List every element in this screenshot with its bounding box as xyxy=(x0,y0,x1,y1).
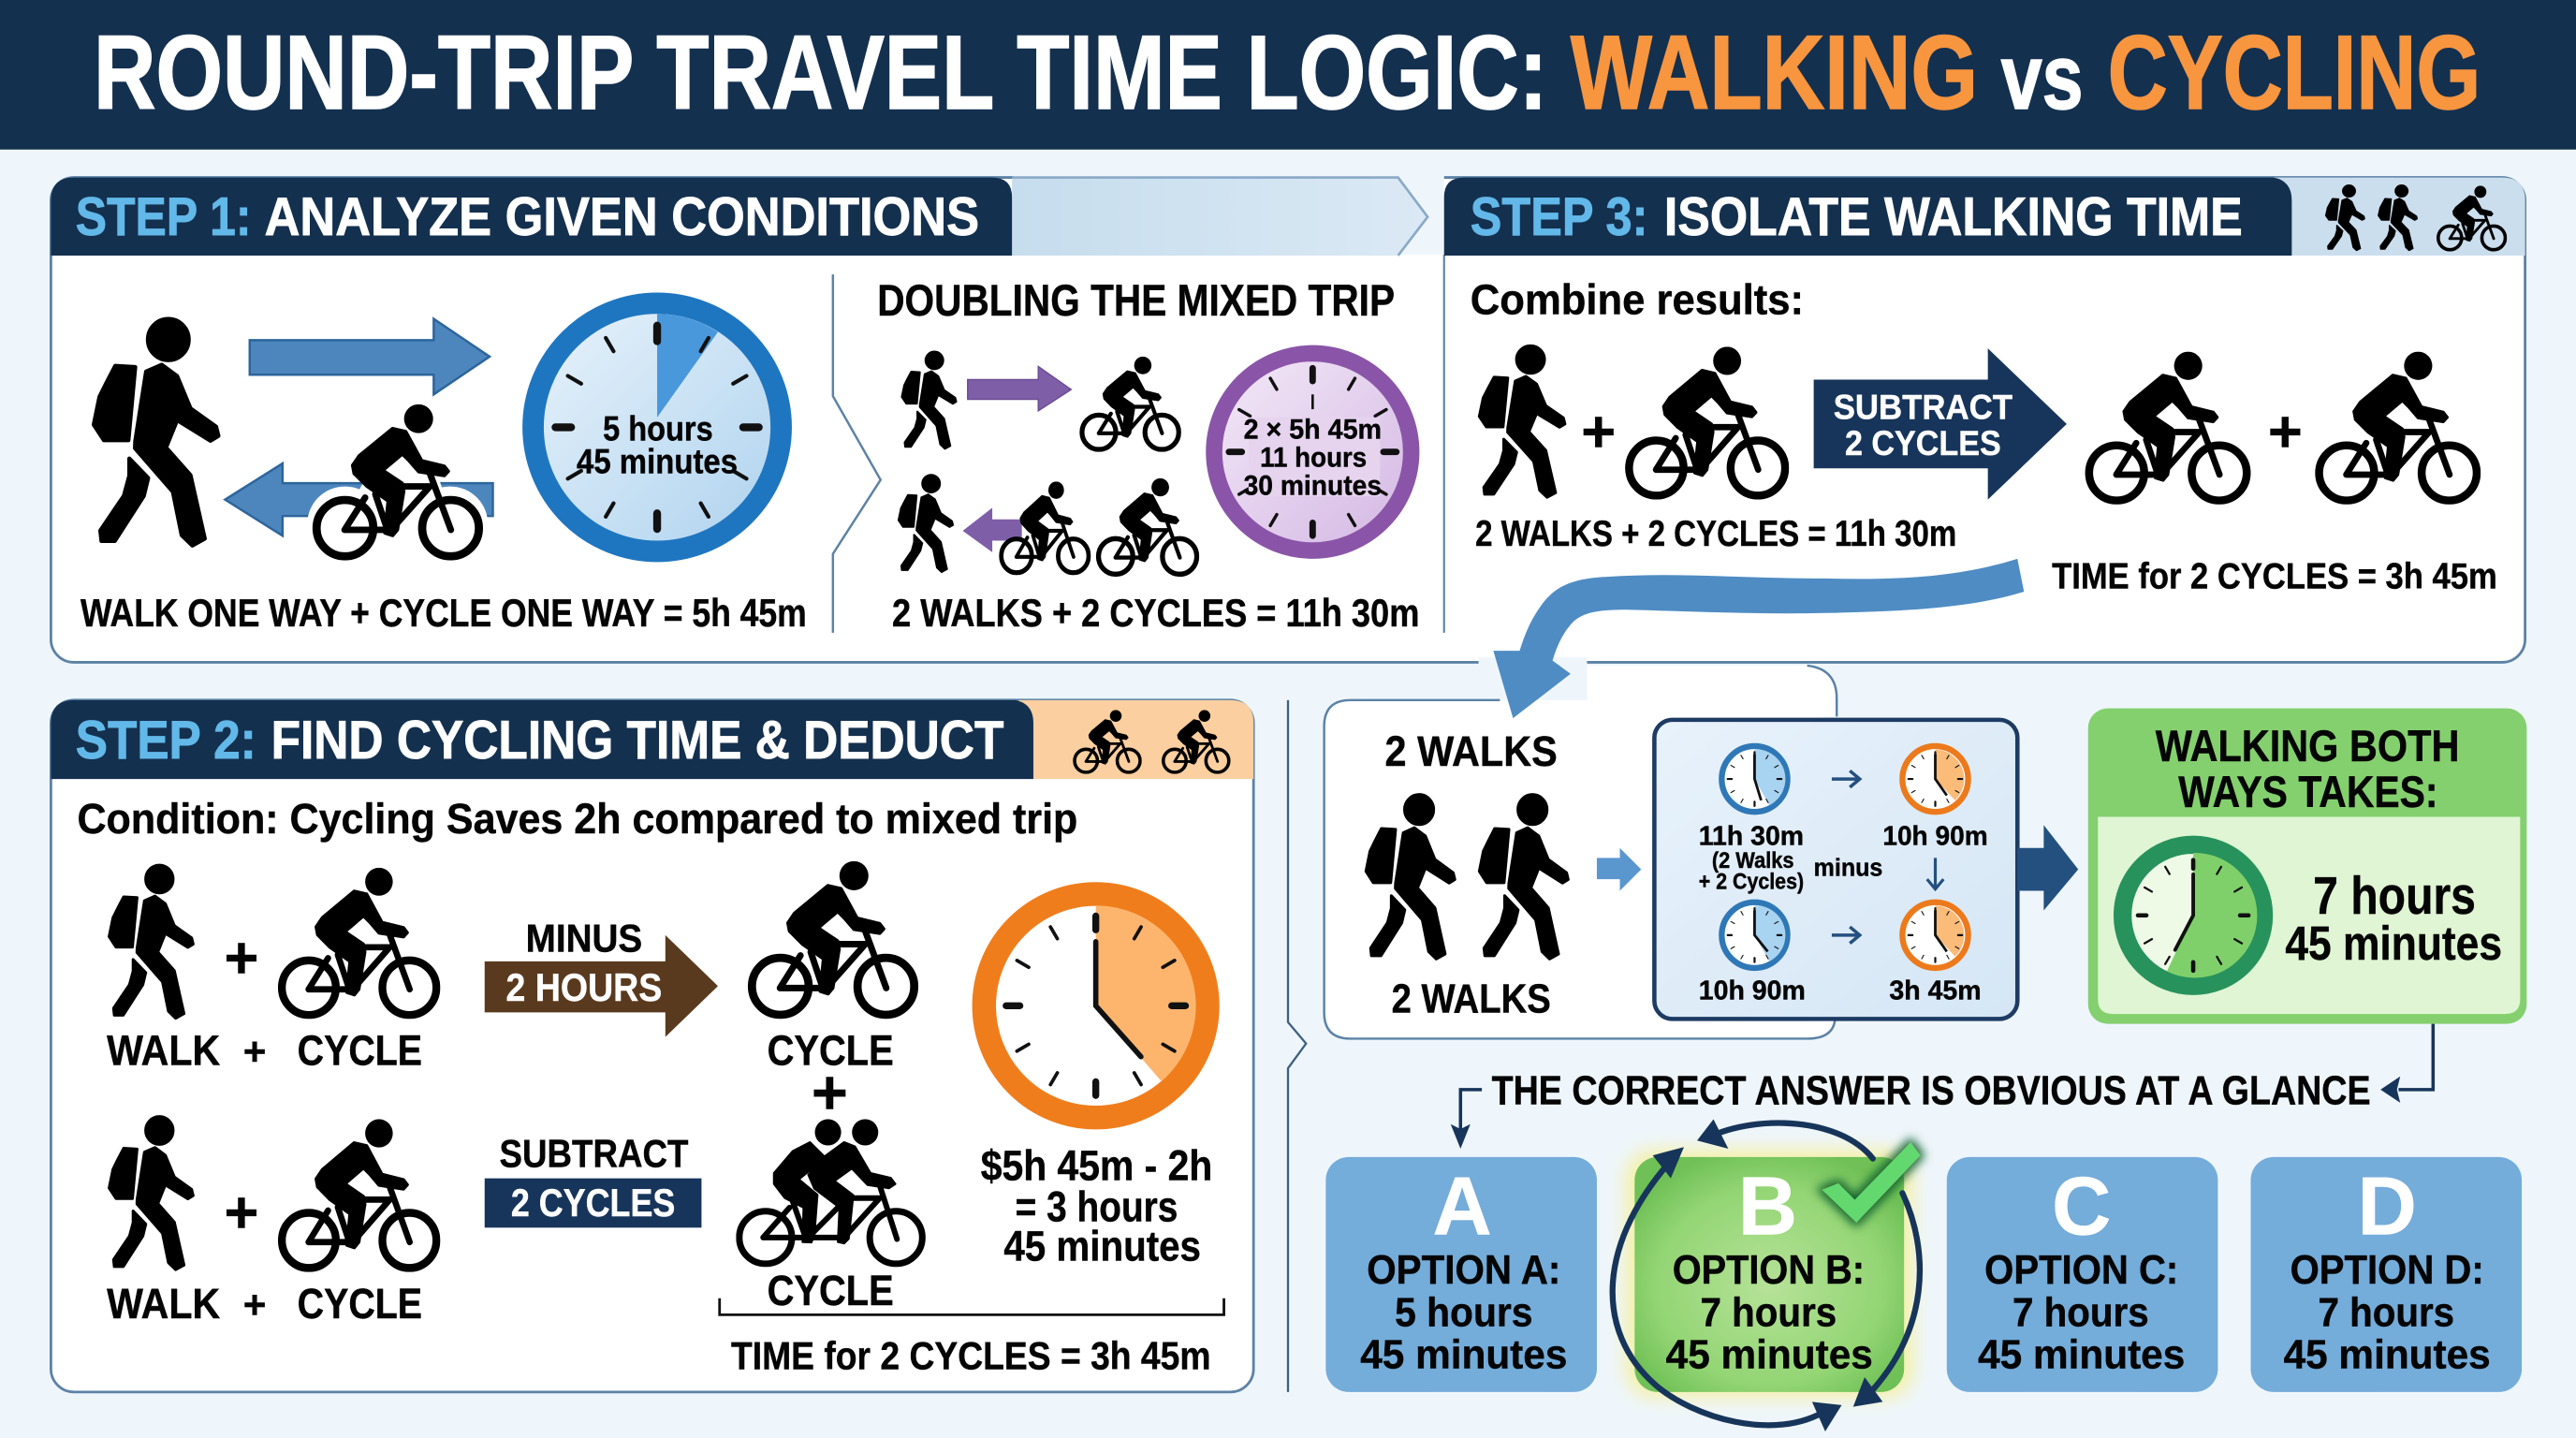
icon: small walker top xyxy=(901,351,957,448)
clock: 3 hours 45 minutes xyxy=(984,894,1208,1118)
icon: cyclist one way xyxy=(307,404,488,562)
row: walk plus cycle top: + xyxy=(243,1030,266,1074)
panel: step 3 header xyxy=(1444,178,2525,256)
clock: 3h 45m xyxy=(1902,902,1969,968)
clock: 10h 90m xyxy=(1902,746,1969,812)
label: mixed one-way trip: WALK ONE WAY + CYCLE ONE WAY = 5h 45m xyxy=(80,591,807,635)
label: 3h 45m: 3h 45m xyxy=(1889,976,1982,1005)
panel: step 1 header xyxy=(51,178,1427,256)
clock: 7 hours 45 minutes xyxy=(2123,844,2264,986)
clock: 11 hours 30 minutes: 30 minutes xyxy=(1244,470,1382,501)
label: 11h 30m: 11h 30m xyxy=(1699,821,1804,851)
row: walk plus cycle bottom: + xyxy=(225,1181,258,1246)
clock: 11h 30m xyxy=(1721,746,1788,812)
option C: 45 minutes xyxy=(1978,1331,2185,1377)
result: 45 minutes: 45 minutes xyxy=(2285,917,2502,970)
icon: walker one way xyxy=(94,319,218,546)
panel: walking both ways result: WAYS TAKES: xyxy=(2178,768,2438,817)
clock: 11 hours 30 minutes: 2 × 5h 45m xyxy=(1244,415,1382,446)
icon: cyclist xyxy=(2320,352,2477,501)
option C: OPTION C: xyxy=(1984,1247,2178,1293)
result: 7 hours: 7 hours xyxy=(2313,866,2476,925)
arrow: down xyxy=(1927,858,1943,889)
arrow: small blue right xyxy=(1597,848,1641,890)
option A xyxy=(1325,1157,1597,1392)
label: 2 walks plus 2 cycles: 2 WALKS + 2 CYCLES = 11h 30m xyxy=(1475,514,1956,554)
label: subtract 2 cycles: 2 CYCLES xyxy=(511,1181,675,1225)
symbol: plus: + xyxy=(2268,400,2303,465)
option C xyxy=(1947,1157,2217,1392)
connector: from result to answer heading xyxy=(2380,1024,2433,1103)
calculation: 5h 45m minus 2h: $5h 45m - 2h xyxy=(981,1141,1212,1189)
heading: combine results: Combine results: xyxy=(1471,275,1804,323)
arrow: outbound xyxy=(250,319,490,394)
label: doubled trip: 2 WALKS + 2 CYCLES = 11h 30m xyxy=(892,591,1419,635)
cycle arrows around option B xyxy=(1613,1123,1920,1425)
arrow: subtract 2 cycles: SUBTRACT xyxy=(1834,389,2012,427)
symbol: plus: + xyxy=(812,1059,848,1128)
panel: step 2: STEP 2: xyxy=(76,711,256,770)
row: walk plus cycle bottom xyxy=(107,1117,436,1328)
title banner: CYCLING xyxy=(2108,13,2481,131)
panel: step 3 header: ISOLATE WALKING TIME xyxy=(1664,187,2243,247)
clock: 11 hours 30 minutes xyxy=(1214,353,1412,550)
icon: cyclist xyxy=(1629,346,1785,495)
label: time for 2 cycles: TIME for 2 CYCLES = 3h 45m xyxy=(731,1333,1211,1377)
arrow: minus 2 hours: 2 HOURS xyxy=(506,965,662,1009)
calculation: 5h 45m minus 2h: = 3 hours xyxy=(1016,1182,1178,1230)
label: 2 walks plus 2 cycles: + 2 Cycles) xyxy=(1699,871,1804,895)
label: 2 walks plus 2 cycles xyxy=(1699,849,1804,895)
icon: cyclist result xyxy=(752,861,915,1015)
calculation: 5h 45m minus 2h xyxy=(981,1141,1212,1269)
label: 10h 90m bottom: 10h 90m xyxy=(1699,976,1806,1005)
option B highlighted: 7 hours xyxy=(1701,1290,1837,1336)
option D: 7 hours xyxy=(2318,1290,2454,1336)
label: cycle: CYCLE xyxy=(768,1027,894,1075)
option B highlighted xyxy=(1613,1119,1921,1431)
panel: two walks: 2 WALKS xyxy=(1392,976,1551,1021)
arrow: purple left xyxy=(962,507,1022,552)
arrowheads xyxy=(1653,1119,1882,1431)
clock: 5 hours 45 minutes: 45 minutes xyxy=(577,443,738,481)
arrow: minus 2 hours: MINUS xyxy=(526,916,642,960)
heading: cycling condition: Condition: Cycling Saves 2h compared to mixed trip xyxy=(77,795,1077,843)
symbol: plus: + xyxy=(1581,400,1616,465)
option A: 5 hours xyxy=(1395,1290,1533,1336)
label: minus: minus xyxy=(1814,854,1882,882)
heading: correct answer: THE CORRECT ANSWER IS OBVIOUS AT A GLANCE xyxy=(1492,1068,2371,1114)
label: 2 walks plus 2 cycles: (2 Walks xyxy=(1712,849,1794,873)
arrow: minus 2 hours xyxy=(485,916,718,1037)
icon: walker xyxy=(1479,345,1565,497)
option A: OPTION A: xyxy=(1367,1247,1560,1293)
label: subtract 2 cycles xyxy=(485,1131,701,1227)
arrow: curved connector from step 3 xyxy=(1479,559,2024,718)
title banner: ROUND-TRIP TRAVEL TIME LOGIC: xyxy=(94,13,1547,131)
panel: two walks: 2 WALKS xyxy=(1385,727,1558,775)
clock: 10h 90m second row xyxy=(1721,902,1788,968)
row: walk plus cycle bottom: + xyxy=(243,1283,266,1327)
row: walk plus cycle bottom: CYCLE xyxy=(298,1280,422,1328)
option D xyxy=(2250,1157,2522,1392)
label: time for 2 cycles: TIME for 2 CYCLES = 3h 45m xyxy=(2052,556,2497,596)
arrow: subtract 2 cycles xyxy=(1814,348,2067,500)
arrow: subtract 2 cycles: 2 CYCLES xyxy=(1845,424,2001,462)
label: 10h 90m: 10h 90m xyxy=(1882,821,1988,851)
divider chevron: step 1 xyxy=(833,274,881,633)
option A: A xyxy=(1432,1160,1492,1252)
row: walk plus cycle top: CYCLE xyxy=(298,1027,422,1075)
clock: 11 hours 30 minutes: 11 hours xyxy=(1260,443,1367,474)
panel: walking both ways result xyxy=(2088,709,2526,1024)
row: walk plus cycle top xyxy=(107,865,436,1075)
label: subtract 2 cycles: SUBTRACT xyxy=(500,1131,689,1175)
panel: walking both ways result: WALKING BOTH xyxy=(2156,722,2459,771)
option C: C xyxy=(2052,1160,2111,1252)
title banner xyxy=(0,0,2576,150)
option D: D xyxy=(2357,1160,2417,1252)
icon: small walker bottom xyxy=(899,475,953,572)
option A: 45 minutes xyxy=(1360,1331,1567,1377)
title banner: WALKING xyxy=(1571,13,1978,131)
option C: 7 hours xyxy=(2012,1290,2149,1336)
bracket: time for 2 cycles xyxy=(720,1299,1224,1314)
clock: 5 hours 45 minutes xyxy=(534,303,782,551)
row: walk plus cycle bottom: WALK xyxy=(107,1280,220,1328)
panel: step 2 xyxy=(51,700,1253,1392)
option D: 45 minutes xyxy=(2284,1331,2491,1377)
divider chevron: lower xyxy=(1288,700,1306,1392)
heading: doubling the mixed trip: DOUBLING THE MIXED TRIP xyxy=(877,276,1395,326)
icon: small cyclist middle xyxy=(1002,481,1089,573)
clock: 5 hours 45 minutes: 5 hours xyxy=(603,409,713,448)
title banner: vs xyxy=(2001,25,2083,128)
arrow: purple right xyxy=(968,366,1071,411)
icon: cyclist xyxy=(2089,352,2247,501)
panel: step 1 header: ANALYZE GIVEN CONDITIONS xyxy=(265,187,979,247)
icon: tandem cyclists xyxy=(739,1119,922,1264)
arrow: dark right to result xyxy=(2017,825,2078,911)
arrow: return xyxy=(225,463,493,536)
option D: OPTION D: xyxy=(2291,1247,2484,1293)
calculation: 5h 45m minus 2h: 45 minutes xyxy=(1003,1222,1201,1269)
option B highlighted: 45 minutes xyxy=(1666,1331,1873,1377)
arrow: right top xyxy=(1832,770,1860,787)
panel: two walks xyxy=(1325,666,1837,1038)
label: cycle: CYCLE xyxy=(768,1267,894,1314)
icon: small cyclist right xyxy=(1099,478,1197,574)
icon: green check mark xyxy=(1822,1142,1921,1223)
panel: subtraction clocks xyxy=(1654,720,2017,1019)
panel: step 2: FIND CYCLING TIME & DEDUCT xyxy=(271,711,1003,770)
option B highlighted: OPTION B: xyxy=(1673,1247,1865,1293)
row: walk plus cycle top: + xyxy=(225,925,258,990)
row: walk plus cycle top: WALK xyxy=(107,1027,220,1075)
icon: small cyclist top xyxy=(1082,357,1178,449)
option B highlighted: B xyxy=(1738,1160,1797,1252)
connector: to options xyxy=(1451,1090,1482,1149)
panel: steps 1 and 3 xyxy=(51,174,2525,662)
panel: step 3 header: STEP 3: xyxy=(1471,187,1647,247)
arrow: right bottom xyxy=(1832,927,1860,944)
panel: step 1 header: STEP 1: xyxy=(76,187,252,247)
